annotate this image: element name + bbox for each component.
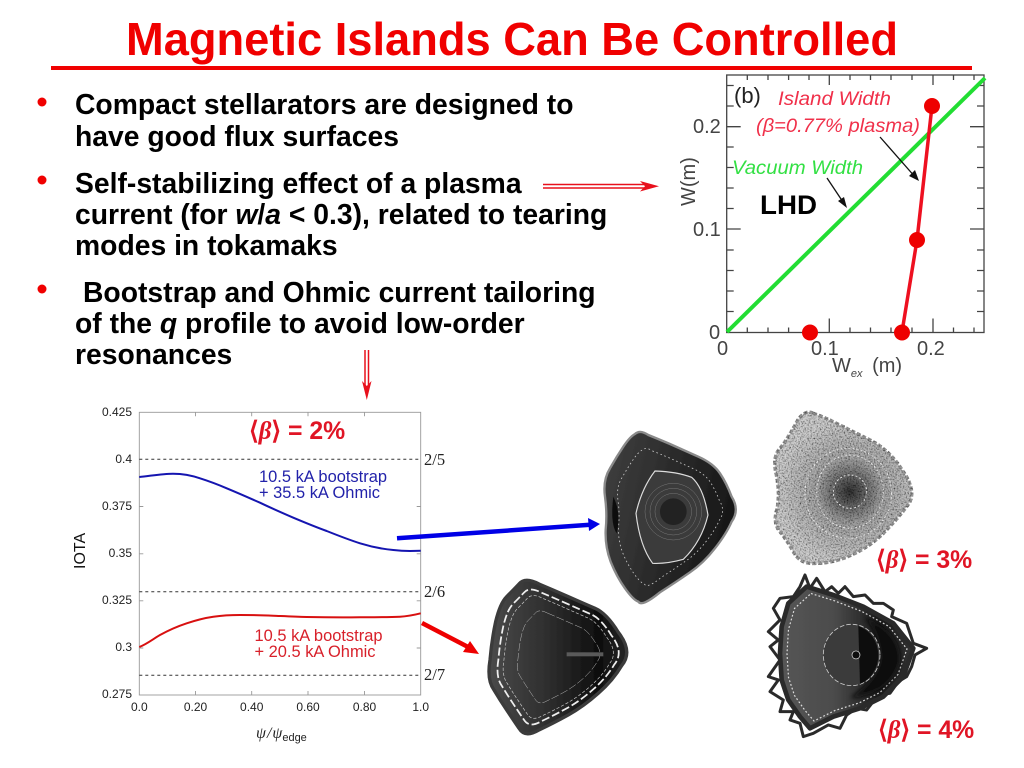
bullet 2: modes in tokamaks (75, 229, 338, 261)
beta 2% label: ⟨β⟩ = 2% (249, 418, 345, 445)
rational labels: 2/7 (424, 665, 445, 684)
axis tick labels: 0 (717, 338, 728, 360)
arrow: double down arrow to iota chart (362, 350, 372, 400)
x axis labels (131, 700, 429, 714)
blue iota curve (139, 474, 421, 551)
axis titles: ex (851, 368, 863, 380)
red iota curve (139, 613, 421, 647)
y axis labels (102, 405, 132, 701)
y axis labels: 0.375 (102, 499, 132, 513)
bullet 1: have good flux surfaces (75, 120, 399, 152)
vacuum width label: Vacuum Width (732, 158, 863, 179)
Poincare plot: red case (489, 580, 627, 734)
rational labels (424, 450, 445, 684)
x axis labels: 0.0 (131, 700, 148, 714)
axis titles: (m) (867, 355, 902, 377)
chart: LHD island width vs external width (678, 75, 985, 380)
bullet 3: of the q profile to avoid low-order (75, 307, 525, 339)
axis titles: W(m) (678, 157, 700, 206)
bullet 3 (38, 276, 596, 370)
axis tick labels: 0 (709, 322, 720, 344)
y axis labels: 0.4 (115, 452, 132, 466)
Poincare plot: beta 4 percent (768, 575, 927, 737)
x axis labels: 0.20 (184, 700, 208, 714)
axis tick labels: 0.2 (693, 116, 721, 138)
red curve label (254, 627, 382, 661)
y axis labels: 0.35 (109, 546, 132, 560)
beta 3% label: ⟨β⟩ = 3% (876, 547, 972, 574)
rational labels: 2/6 (424, 582, 445, 601)
blue curve label: + 35.5 kA Ohmic (259, 484, 380, 502)
island width label: Island Width (778, 89, 891, 110)
arrow: red curve to lower surface (422, 623, 479, 654)
island width label (756, 89, 920, 137)
x axis title: ψ/ψ (256, 725, 282, 742)
vacuum width line (727, 78, 985, 332)
y axis title: IOTA (72, 533, 89, 569)
title underline (51, 66, 972, 70)
chart: IOTA profiles (72, 405, 445, 744)
arrow: double right arrow to LHD plot (543, 181, 659, 192)
arrow: blue curve to beta 2 percent surface (397, 518, 600, 538)
bullet 1: Compact stellarators are designed to (75, 88, 573, 120)
axis tick labels: 0.2 (917, 338, 945, 360)
x axis labels: 0.60 (296, 700, 320, 714)
x axis labels: 0.40 (240, 700, 264, 714)
bullet 1 (38, 88, 573, 152)
blue curve label (259, 468, 387, 502)
island width label: (β=0.77% plasma) (756, 116, 920, 137)
y axis labels: 0.425 (102, 405, 132, 419)
y axis labels: 0.325 (102, 593, 132, 607)
title: Magnetic Islands Can Be Controlled (126, 13, 898, 65)
red curve label: 10.5 kA bootstrap (254, 627, 382, 645)
axis tick labels: 0.1 (693, 219, 721, 241)
axis tick labels: 0.1 (811, 338, 839, 360)
x axis labels: 0.80 (353, 700, 377, 714)
axis tick labels (693, 116, 945, 360)
pointer arrows (827, 137, 919, 208)
y axis labels: 0.3 (115, 640, 132, 654)
rational labels: 2/5 (424, 450, 445, 469)
axis titles: W (832, 355, 851, 377)
red curve label: + 20.5 kA Ohmic (254, 643, 376, 661)
island width line and points (802, 98, 940, 340)
LHD label: LHD (760, 190, 817, 220)
bullet 2: current (for w/a < 0.3), related to tearing (75, 198, 607, 230)
x axis labels: 1.0 (412, 700, 429, 714)
bullet 2: Self-stabilizing effect of a plasma (75, 167, 522, 199)
bullet list (38, 88, 607, 370)
axis titles (678, 157, 902, 380)
panel letter: (b) (734, 83, 761, 108)
bullet 3: Bootstrap and Ohmic current tailoring (83, 276, 596, 308)
bullet 2 (38, 167, 607, 261)
x axis title: edge (282, 732, 307, 744)
blue curve label: 10.5 kA bootstrap (259, 468, 387, 486)
plot frame and ticks (139, 412, 421, 695)
y axis labels: 0.275 (102, 687, 132, 701)
Poincare plot: blue case (604, 432, 736, 603)
rational surface reference lines (139, 459, 421, 675)
plot frame and ticks (727, 75, 984, 332)
bullet 3: resonances (75, 338, 232, 370)
Poincare plot: beta 3 percent (775, 412, 912, 564)
beta 4% label: ⟨β⟩ = 4% (878, 717, 974, 744)
